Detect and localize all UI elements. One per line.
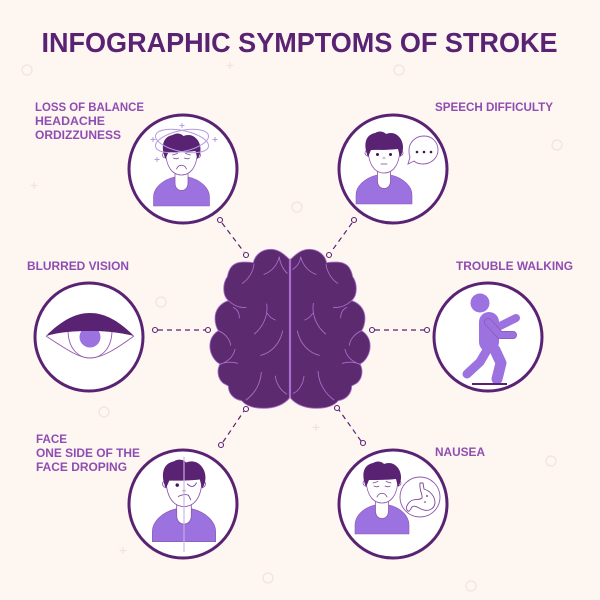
label: loss of balance: LOSS OF BALANCE [35, 102, 144, 114]
person: face droop [152, 457, 216, 552]
label: face: ONE SIDE OF THE [36, 448, 140, 460]
speech bubble [408, 136, 438, 164]
label: nausea: NAUSEA [435, 447, 485, 459]
panel: nausea [339, 450, 447, 558]
person: dizzy [154, 133, 210, 206]
title: INFOGRAPHIC SYMPTOMS OF STROKE [42, 27, 558, 58]
label: speech difficulty: SPEECH DIFFICULTY [435, 102, 553, 114]
person: speech [356, 131, 412, 204]
dizzy orbit rings [150, 123, 218, 162]
label: blurred vision: BLURRED VISION [27, 261, 129, 273]
icon: eye [46, 313, 134, 358]
person: nausea [355, 461, 409, 534]
label: face: FACE [36, 434, 67, 446]
brain [210, 249, 370, 408]
icon: walking figure [467, 294, 516, 384]
panel: loss of balance [129, 115, 237, 223]
label: loss of balance: ORDIZZUNESS [35, 130, 121, 142]
label: face [36, 434, 140, 474]
label: face: FACE DROPING [36, 462, 127, 474]
connector lines [152, 218, 430, 448]
panel: speech difficulty [339, 115, 447, 223]
panel: trouble walking [434, 283, 542, 391]
label: loss of balance [35, 102, 144, 142]
panel: blurred vision [35, 283, 143, 391]
label: loss of balance: HEADACHE [35, 116, 105, 128]
icon: stomach [400, 477, 440, 517]
panel: face droop [129, 450, 237, 558]
label: trouble walking: TROUBLE WALKING [456, 261, 573, 273]
